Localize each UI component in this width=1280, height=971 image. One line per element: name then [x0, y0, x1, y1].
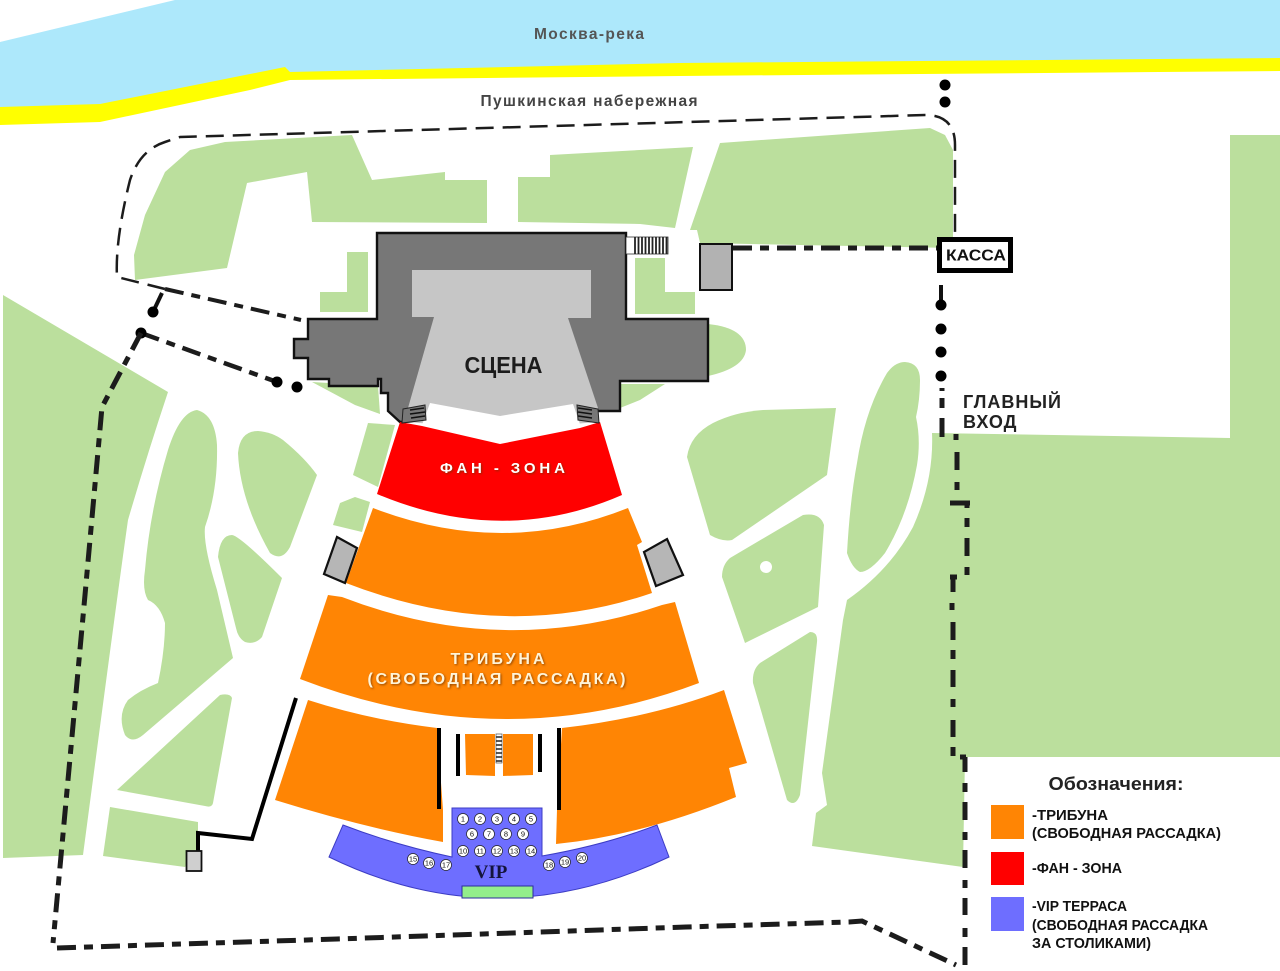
main entrance label	[963, 391, 1062, 432]
stand: centre block left	[465, 734, 495, 776]
VIP tables: 9	[521, 830, 525, 838]
VIP tables: 12	[493, 846, 501, 856]
lawn: big east	[812, 135, 1280, 867]
VIP tables: 18	[545, 860, 553, 870]
VIP label: VIP	[475, 862, 508, 883]
lawn: north-east	[690, 128, 953, 248]
dashed route thick to building	[165, 289, 301, 320]
VIP tables: 17	[442, 860, 450, 870]
stand: lower right block	[556, 690, 747, 844]
centre stairs	[496, 734, 502, 763]
stage stairs right	[577, 405, 599, 423]
embankment strip	[0, 58, 1280, 125]
VIP tables: 2	[478, 814, 482, 824]
stand label: ТРИБУНА	[450, 651, 545, 668]
VIP tables: 7	[487, 830, 491, 838]
ticket office: КАССА	[946, 248, 1006, 264]
stand seating label: (СВОБОДНАЯ РАССАДКА)	[368, 671, 626, 688]
label: river name: Москва-река	[534, 26, 644, 43]
VIP tables: 14	[527, 846, 535, 856]
stand: upper tier	[346, 508, 652, 616]
perimeter thin dashed route	[117, 115, 955, 289]
VIP tables: 20	[578, 854, 586, 862]
perimeter thick dashed route west and south	[53, 333, 956, 965]
south-west kiosk	[186, 851, 202, 871]
ticket office	[940, 240, 1010, 270]
lawn: lower centre-west blob	[218, 535, 282, 643]
VIP tables: 6	[470, 830, 474, 838]
legend swatch: fan zone	[991, 852, 1024, 885]
grey kiosk north-east	[700, 244, 732, 290]
barriers	[439, 728, 559, 810]
main entrance label: ВХОД	[963, 412, 1017, 432]
legend text: stand: (СВОБОДНАЯ РАССАДКА)	[1032, 825, 1221, 842]
legend	[991, 774, 1221, 952]
legend text: VIP: ЗА СТОЛИКАМИ)	[1032, 935, 1151, 952]
lawn: east bulge	[708, 324, 746, 376]
stand: lower left block	[275, 700, 443, 842]
entrance dots	[936, 80, 950, 382]
lawn: east elongated blob	[847, 362, 920, 572]
stand: centre block right	[503, 734, 533, 776]
lawn: north-west	[134, 135, 487, 280]
green areas	[3, 128, 1280, 867]
stand: middle tier	[300, 595, 699, 719]
lawn: triangle	[117, 694, 232, 807]
side kiosk left	[324, 537, 357, 583]
dashed route to ticket office	[733, 246, 938, 250]
VIP tables	[408, 814, 588, 870]
legend text: stand: -ТРИБУНА	[1032, 807, 1108, 824]
legend text: fan zone: -ФАН - ЗОНА	[1032, 860, 1122, 877]
south-west access line	[198, 698, 296, 851]
VIP tables: 5	[529, 814, 533, 824]
legend title: Обозначения:	[1048, 774, 1184, 794]
legend text: VIP: -VIP ТЕРРАСА	[1032, 898, 1127, 915]
VIP tables: 15	[409, 854, 417, 864]
VIP tables: 1	[461, 814, 465, 824]
side kiosk right	[644, 539, 683, 586]
VIP tables: 13	[510, 846, 518, 856]
legend text: VIP	[1032, 898, 1208, 952]
VIP tables: 19	[561, 858, 569, 866]
VIP tables: 3	[495, 814, 499, 824]
lawn: north centre	[518, 147, 693, 228]
VIP tables: 8	[504, 830, 508, 838]
dashed route to west dots	[136, 328, 302, 392]
lawn: south-west rectangle	[103, 807, 198, 867]
lawn: below building right	[620, 384, 665, 408]
fan zone label: ФАН - ЗОНА	[440, 460, 565, 477]
lawn: south-east narrow blob	[753, 632, 817, 803]
lawn: below building left	[312, 382, 380, 414]
lawn: big west	[3, 295, 168, 858]
lawn: east blob two	[722, 514, 824, 643]
fan zone	[377, 422, 622, 521]
label: embankment name: Пушкинская набережная	[480, 93, 698, 110]
stage front white area	[422, 403, 581, 443]
legend swatch: stand	[991, 805, 1024, 839]
stage	[408, 270, 598, 430]
VIP stage strip	[462, 886, 533, 898]
lawn: centre-west blob	[238, 431, 317, 556]
stage title: СЦЕНА	[464, 352, 542, 378]
VIP tables: 16	[425, 858, 433, 868]
VIP tables: 10	[459, 846, 467, 856]
VIP tables: 11	[476, 846, 484, 856]
stairs north-east	[626, 237, 668, 254]
lawn: beside building right	[635, 258, 695, 314]
main entrance label: ГЛАВНЫЙ	[963, 391, 1062, 412]
legend swatch: VIP	[991, 897, 1024, 931]
lawn: west blob	[122, 410, 233, 740]
perimeter thick dashed route east	[942, 388, 970, 965]
venue building	[294, 233, 708, 422]
legend text: stand	[1032, 807, 1221, 842]
lawn: small wedge	[333, 497, 370, 532]
lawn: east blob one	[687, 408, 836, 540]
river	[0, 0, 1280, 112]
legend text: VIP: (СВОБОДНАЯ РАССАДКА	[1032, 917, 1208, 934]
entrance stub with dot	[148, 293, 162, 318]
VIP terrace	[329, 808, 669, 898]
lawn: beside building left	[320, 252, 368, 312]
stage stairs left	[402, 405, 426, 423]
VIP tables: 4	[512, 814, 516, 824]
lawn: wedge by fan zone	[353, 423, 395, 487]
